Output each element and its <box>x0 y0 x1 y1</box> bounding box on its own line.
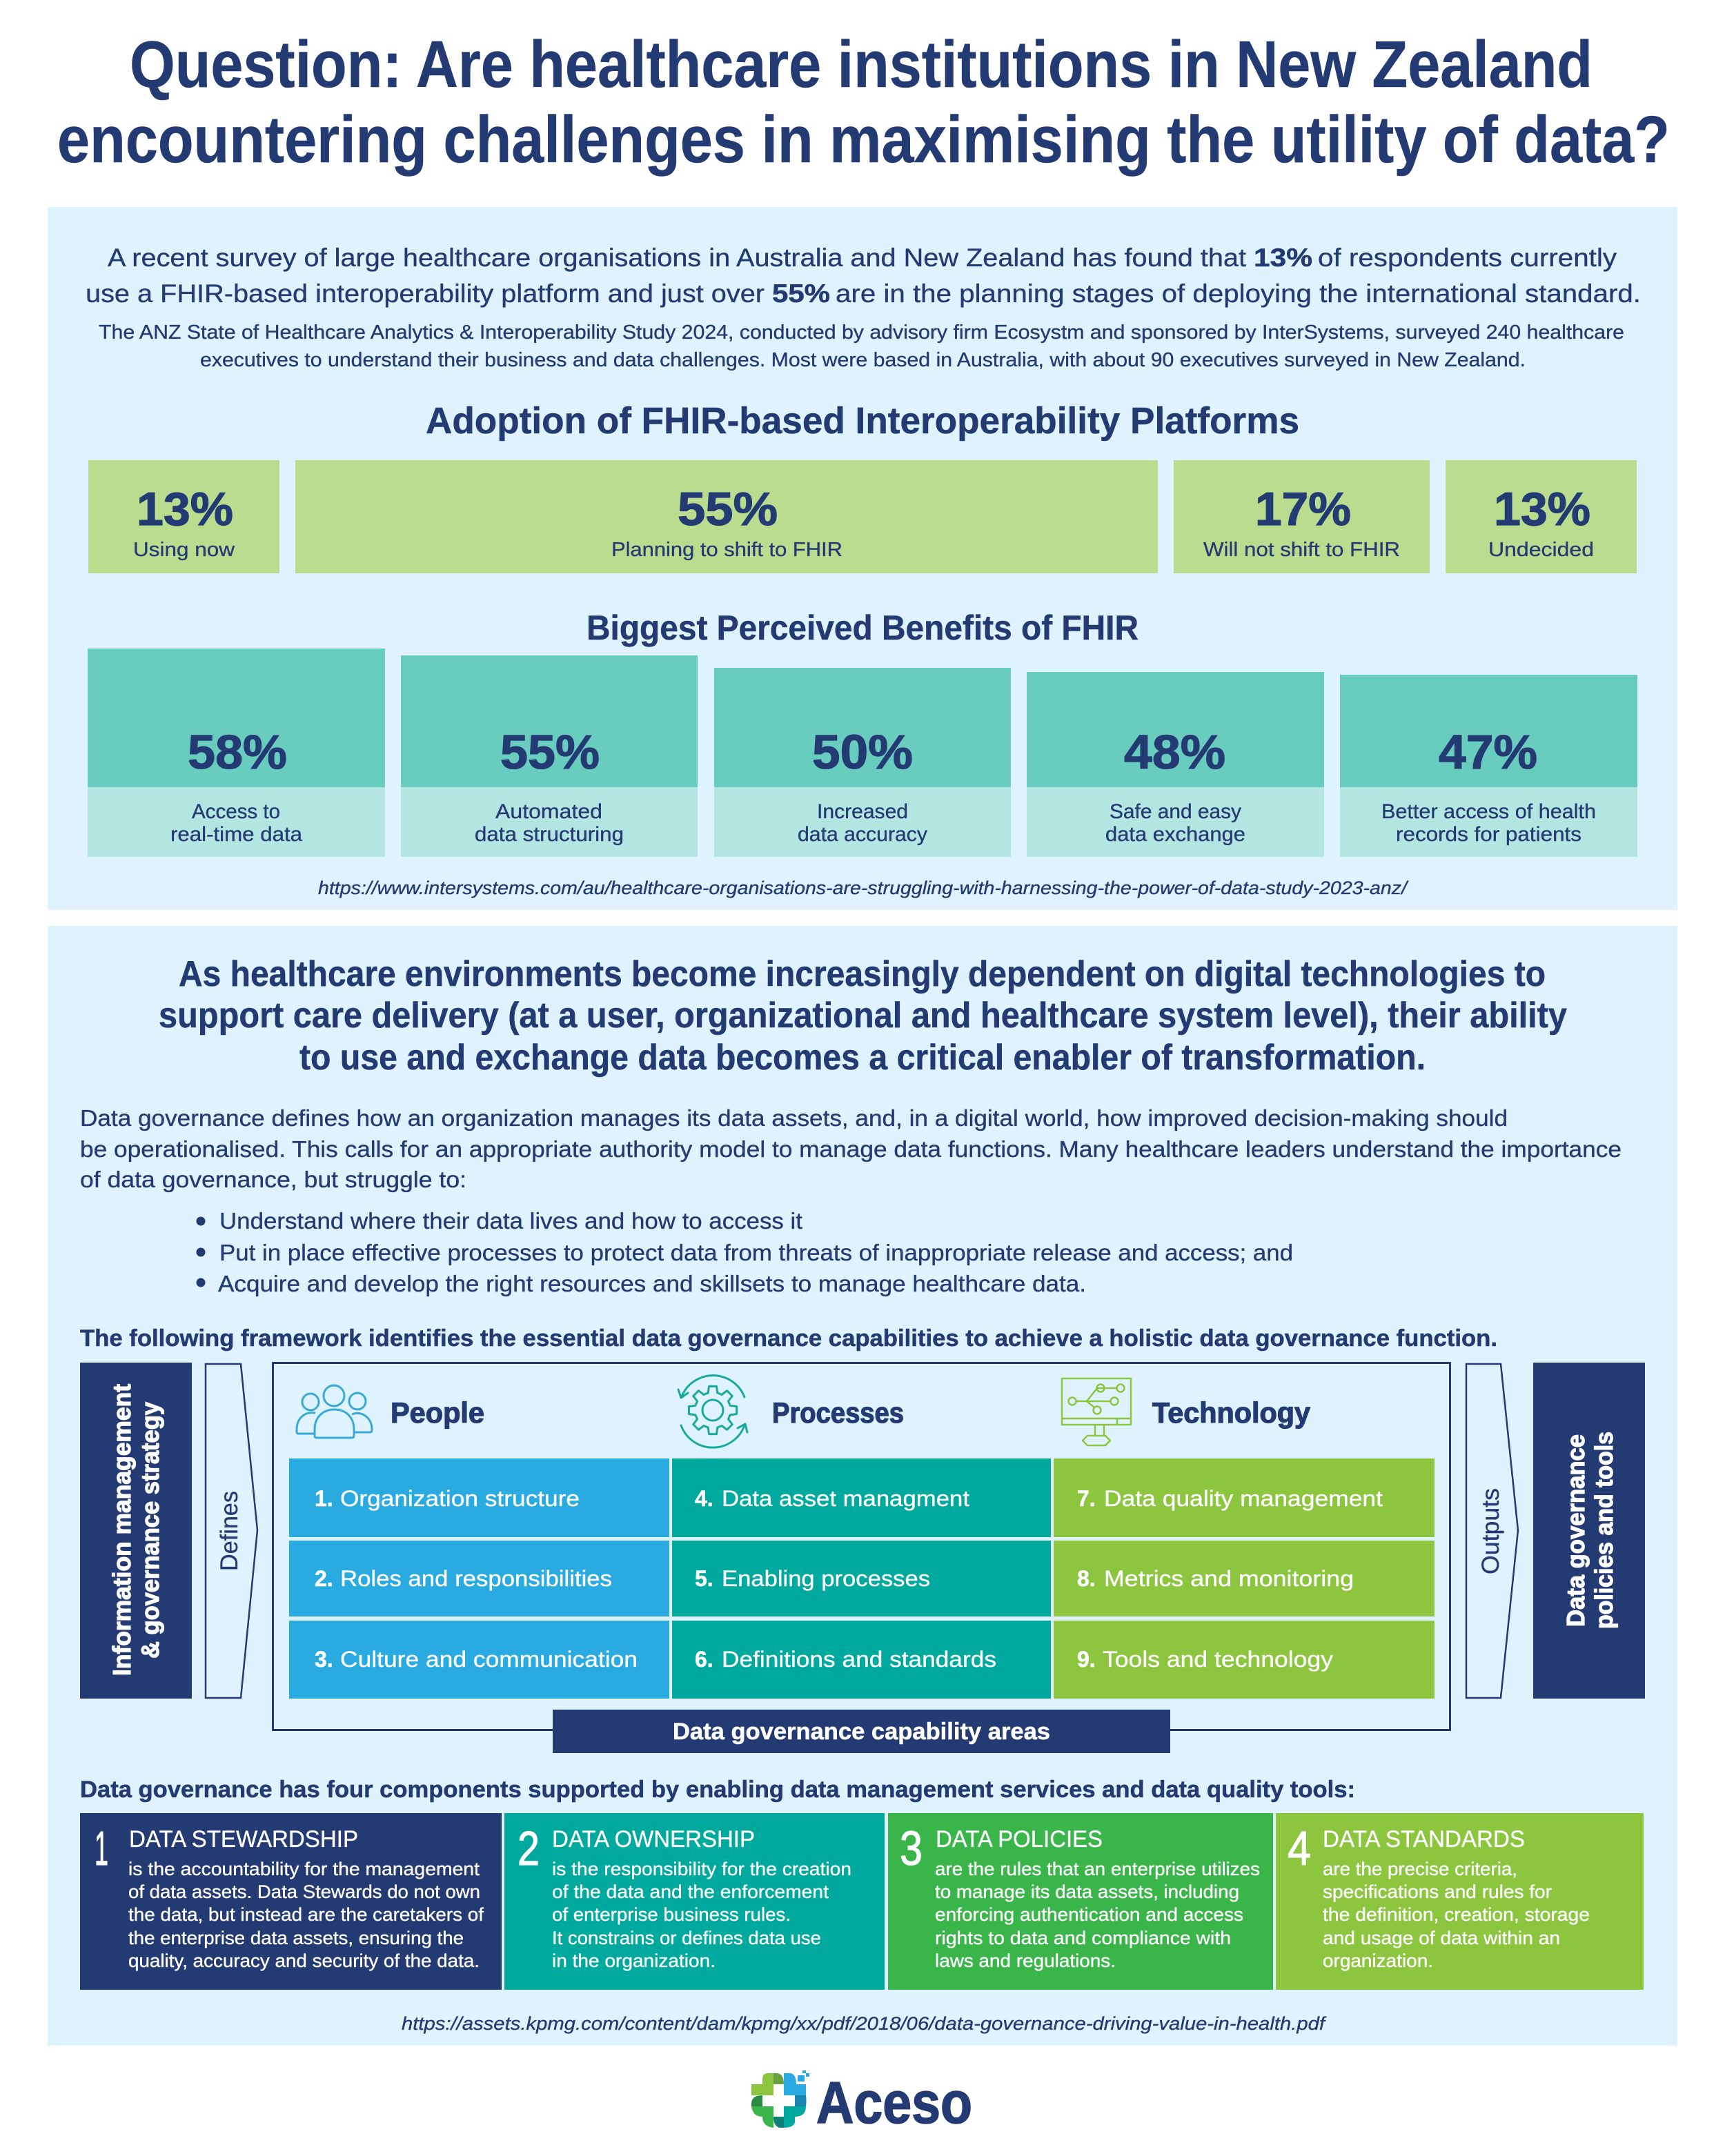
cells: technology: 7. <box>1077 1486 1096 1511</box>
benefit: data exchange: data exchange <box>1105 823 1245 846</box>
input box: strategy: Information management <box>108 1384 136 1676</box>
output box: policies and tools <box>1533 1363 1645 1699</box>
label bar: capability areas <box>553 1710 1170 1753</box>
component 2: data ownership: of the data and the enforcement <box>552 1881 829 1902</box>
title <box>57 28 1670 177</box>
cells: people: 2. <box>315 1566 333 1591</box>
component 1: data stewardship: the enterprise data assets, ensuring the <box>128 1928 464 1948</box>
adoption: will not shift: Will not shift to FHIR <box>1203 539 1400 561</box>
arrow: defines: Defines <box>216 1491 243 1571</box>
bullet list: Understand where their data lives and how to access it <box>219 1208 802 1234</box>
benefit: access to health records: Better access of health <box>1381 800 1596 823</box>
study description <box>99 322 1624 371</box>
intro text: use a FHIR-based interoperability platform and just over <box>86 279 765 308</box>
bullet list: Put in place effective processes to protect data from threats of inappropriate release and access; and <box>219 1240 1293 1265</box>
component 1: data stewardship <box>80 1813 502 1990</box>
intro paragraph: be operationalised. This calls for an appropriate authority model to manage data functions. Many healthcare leaders understand the importance <box>80 1136 1621 1162</box>
cells: processes: 4. <box>695 1486 713 1511</box>
component 2: data ownership: of enterprise business rules. <box>552 1904 791 1925</box>
framework lead-in: The following framework identifies the essential data governance capabilities to achieve a holistic data governance function. <box>80 1325 1497 1352</box>
benefit: data exchange: Safe and easy <box>1110 800 1241 823</box>
intro text <box>86 244 1641 308</box>
cells: technology: 9. <box>1077 1647 1096 1672</box>
panel: survey and FHIR adoption <box>48 207 1677 910</box>
adoption: will not shift: 17% <box>1255 483 1351 535</box>
component 1: data stewardship: quality, accuracy and security of the data. <box>128 1950 480 1971</box>
benefit: data accuracy: 50% <box>812 725 913 779</box>
icon: monitor with network <box>1062 1378 1131 1445</box>
component 3: data policies: 3 <box>900 1821 923 1875</box>
component 4: data standards: DATA STANDARDS <box>1323 1826 1525 1852</box>
component 4: data standards: 4 <box>1288 1821 1311 1875</box>
logo: Aceso <box>751 2070 972 2136</box>
label bar: capability areas: Data governance capability areas <box>673 1719 1050 1745</box>
cells: technology: Metrics and monitoring <box>1104 1566 1354 1591</box>
adoption: using now <box>88 460 279 573</box>
intro text: 13% <box>1254 244 1312 272</box>
benefits chart <box>88 649 1637 857</box>
component 2: data ownership: is the responsibility for the creation <box>552 1859 851 1879</box>
section heading: As healthcare environments become increasingly dependent on digital technologies to <box>179 954 1546 994</box>
component 4: data standards: specifications and rules for <box>1323 1881 1552 1902</box>
cells: technology: Data quality management <box>1104 1486 1383 1511</box>
input box: strategy <box>80 1363 192 1699</box>
component 2: data ownership: in the organization. <box>552 1950 716 1971</box>
benefit: data exchange: 48% <box>1124 725 1225 779</box>
adoption: using now: Using now <box>133 539 235 561</box>
intro text: of respondents currently <box>1318 244 1617 272</box>
arrow: outputs <box>1466 1364 1518 1698</box>
adoption: undecided: Undecided <box>1488 539 1594 561</box>
heading: benefits: Biggest Perceived Benefits of FHIR <box>586 609 1138 647</box>
cells: processes: Enabling processes <box>722 1566 930 1591</box>
cells: people: 1. <box>315 1486 333 1511</box>
adoption: undecided <box>1446 460 1637 573</box>
components lead-in: Data governance has four components supported by enabling data management services and data quality tools: <box>80 1777 1355 1803</box>
bullet list: Acquire and develop the right resources and skillsets to manage healthcare data. <box>218 1271 1086 1296</box>
benefit: access to health records: records for patients <box>1396 823 1581 846</box>
benefit: data accuracy <box>714 668 1011 857</box>
icon: gear with arrows <box>678 1376 747 1447</box>
column: people <box>289 1385 669 1699</box>
benefit: data structuring: 55% <box>500 725 600 779</box>
cells: people <box>289 1458 669 1699</box>
component 3: data policies: are the rules that an enterprise utilizes <box>935 1859 1260 1879</box>
study description: executives to understand their business and data challenges. Most were based in Australia, with about 90 executives surveyed in New Zealand. <box>200 349 1526 371</box>
heading: adoption: Adoption of FHIR-based Interoperability Platforms <box>426 400 1299 442</box>
benefit: data accuracy: data accuracy <box>798 823 927 846</box>
intro paragraph: of data governance, but struggle to: <box>80 1167 466 1192</box>
output box: policies and tools: policies and tools <box>1590 1432 1618 1629</box>
input box: strategy: & governance strategy <box>136 1402 164 1659</box>
component 1: data stewardship: is the accountability for the management <box>128 1859 480 1879</box>
component 4: data standards: and usage of data within an <box>1323 1928 1560 1948</box>
benefit: access to health records: 47% <box>1439 725 1537 779</box>
intro paragraph: Data governance defines how an organization manages its data assets, and, in a digital world, how improved decision-making should <box>80 1105 1508 1131</box>
section heading: support care delivery (at a user, organizational and healthcare system level), their ability <box>159 996 1567 1036</box>
component 3: data policies: to manage its data assets, including <box>935 1881 1239 1902</box>
column: technology: Technology <box>1152 1396 1311 1429</box>
component 4: data standards: the definition, creation, storage <box>1323 1904 1590 1925</box>
logo: Aceso: Aceso <box>816 2070 972 2136</box>
bullet list <box>196 1208 1293 1296</box>
benefit: real-time data: Access to <box>192 800 280 823</box>
component 4: data standards: are the precise criteria, <box>1323 1859 1517 1879</box>
adoption: planning to shift: 55% <box>678 483 778 535</box>
column: technology <box>1054 1378 1435 1699</box>
benefit: access to health records <box>1340 675 1637 857</box>
column: processes <box>672 1376 1051 1699</box>
intro text: are in the planning stages of deploying the international standard. <box>836 279 1641 308</box>
section heading <box>159 954 1567 1078</box>
component 1: data stewardship: DATA STEWARDSHIP <box>129 1826 358 1852</box>
component 1: data stewardship: 1 <box>95 1821 108 1875</box>
adoption: planning to shift <box>295 460 1158 573</box>
benefit: data exchange <box>1027 672 1324 857</box>
cells: people: Culture and communication <box>340 1647 638 1672</box>
benefit: real-time data: real-time data <box>170 823 302 846</box>
cells: processes <box>672 1458 1051 1699</box>
intro text: 55% <box>772 279 830 308</box>
section heading: to use and exchange data becomes a critical enabler of transformation. <box>299 1038 1426 1078</box>
component 2: data ownership <box>504 1813 885 1990</box>
cells: technology: Tools and technology <box>1103 1647 1333 1672</box>
framework diagram <box>80 1363 1645 1753</box>
column: processes: Processes <box>772 1396 904 1429</box>
panel: data governance <box>48 926 1677 2046</box>
adoption: will not shift <box>1174 460 1430 573</box>
benefit: data structuring: data structuring <box>475 823 624 846</box>
component 1: data stewardship: of data assets. Data Stewards do not own <box>128 1881 480 1902</box>
arrow: outputs: Outputs <box>1477 1488 1504 1574</box>
cells: processes: 6. <box>695 1647 713 1672</box>
cells: people: Organization structure <box>340 1486 580 1511</box>
icon: people <box>297 1385 372 1438</box>
intro text: A recent survey of large healthcare organisations in Australia and New Zealand has found that <box>108 244 1247 272</box>
adoption: using now: 13% <box>137 483 233 535</box>
component 2: data ownership: 2 <box>518 1821 540 1875</box>
component 3: data policies: rights to data and compliance with <box>935 1928 1231 1948</box>
benefit: data structuring: Automated <box>495 800 602 823</box>
component 4: data standards <box>1276 1813 1644 1990</box>
component 4: data standards: organization. <box>1323 1950 1433 1971</box>
output box: policies and tools: Data governance <box>1561 1434 1590 1627</box>
source link: KPMG: https://assets.kpmg.com/content/dam/kpmg/xx/pdf/2018/06/data-governance-driving-value-in-health.pdf <box>402 2013 1327 2034</box>
adoption: undecided: 13% <box>1494 483 1590 535</box>
component 3: data policies <box>888 1813 1273 1990</box>
component 3: data policies: laws and regulations. <box>935 1950 1116 1971</box>
column: people: People <box>391 1396 484 1429</box>
adoption: planning to shift: Planning to shift to FHIR <box>611 539 842 561</box>
capability frame <box>273 1363 1450 1753</box>
benefit: data accuracy: Increased <box>817 800 908 823</box>
icon: medical cross <box>751 2070 809 2128</box>
component 3: data policies: DATA POLICIES <box>936 1826 1103 1852</box>
cells: technology: 8. <box>1077 1566 1096 1591</box>
arrow: defines <box>206 1364 257 1698</box>
cells: processes: Data asset managment <box>722 1486 969 1511</box>
intro paragraph <box>80 1105 1621 1192</box>
benefit: real-time data: 58% <box>188 725 287 779</box>
source link: InterSystems: https://www.intersystems.com/au/healthcare-organisations-are-struggling-with-harnessing-the-power-of-data-study-2023-anz/ <box>318 878 1409 898</box>
cells: processes: Definitions and standards <box>722 1647 996 1672</box>
adoption chart <box>88 460 1637 573</box>
cells: processes: 5. <box>695 1566 713 1591</box>
cells: people: 3. <box>315 1647 333 1672</box>
component 2: data ownership: It constrains or defines data use <box>552 1928 821 1948</box>
cells: people: Roles and responsibilities <box>340 1566 612 1591</box>
cells: technology <box>1054 1458 1435 1699</box>
study description: The ANZ State of Healthcare Analytics & Interoperability Study 2024, conducted by advisory firm Ecosystm and sponsored by InterSystems, surveyed 240 healthcare <box>99 322 1624 344</box>
component 2: data ownership: DATA OWNERSHIP <box>552 1826 755 1852</box>
component 3: data policies: enforcing authentication and access <box>935 1904 1243 1925</box>
benefit: real-time data <box>88 649 385 857</box>
components row <box>80 1813 1644 1990</box>
component 1: data stewardship: the data, but instead are the caretakers of <box>128 1904 484 1925</box>
benefit: data structuring <box>401 655 698 857</box>
